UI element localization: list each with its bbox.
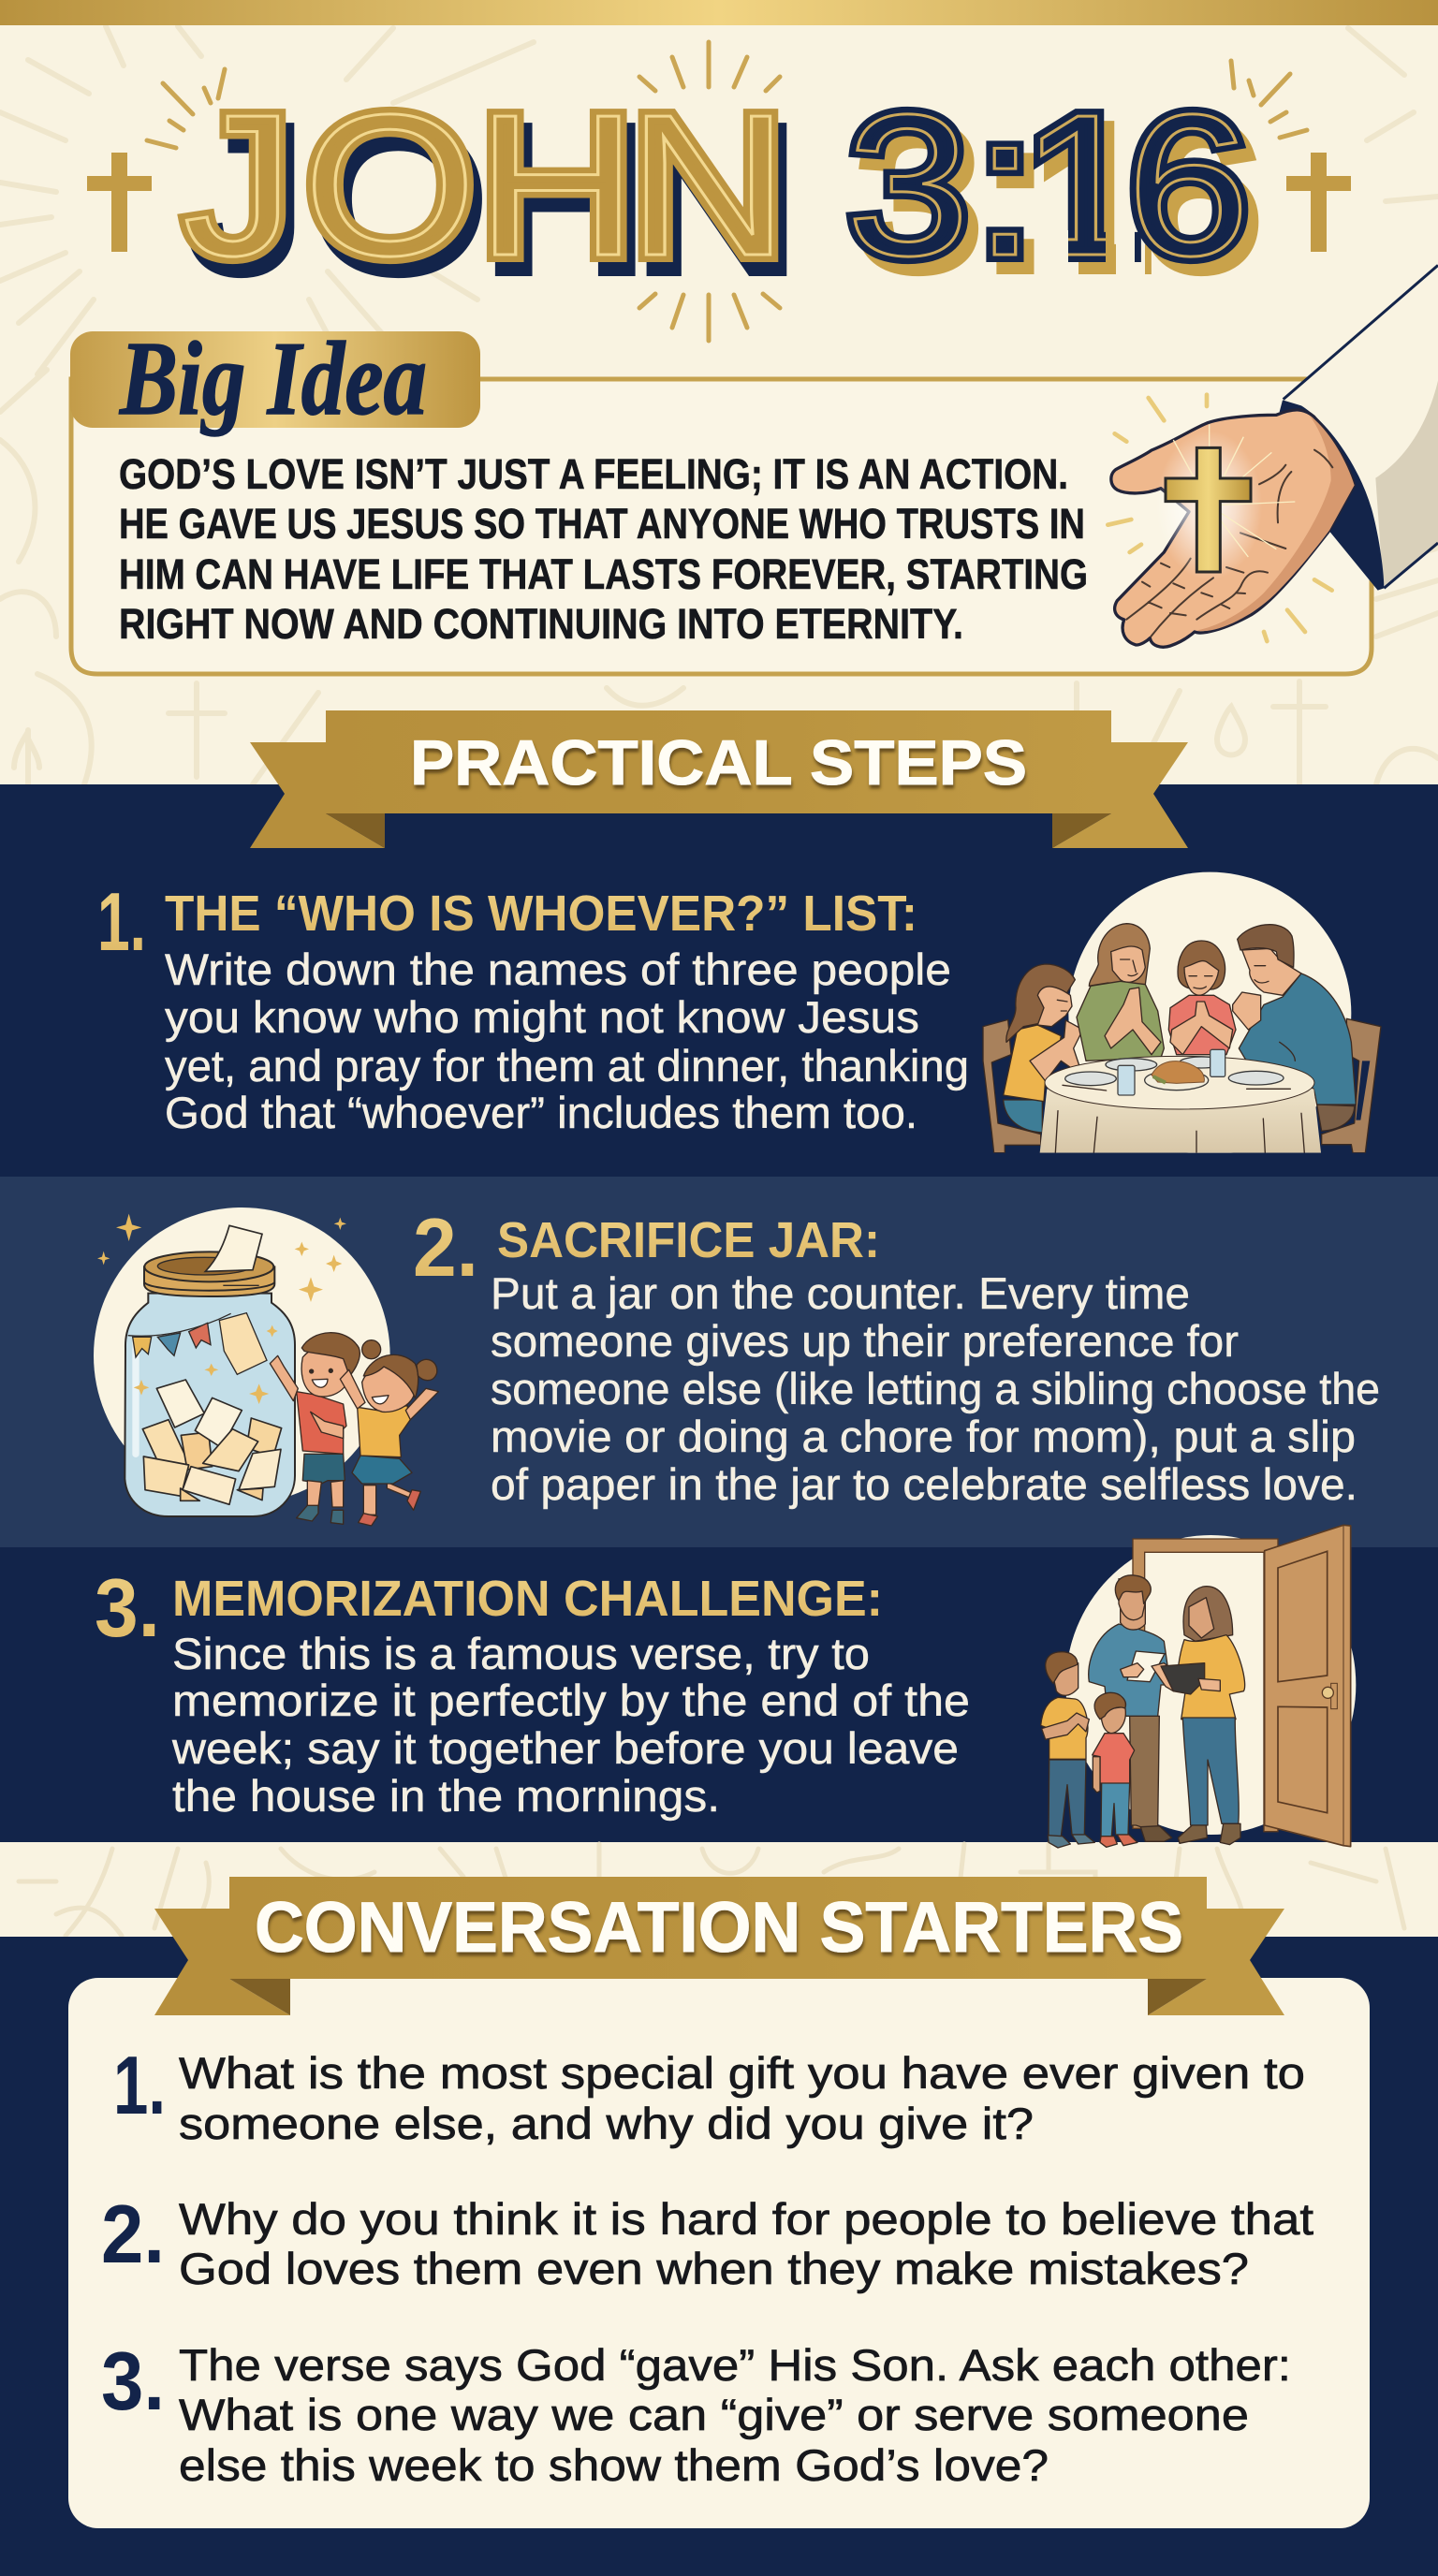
- step 1 body: God that “whoever” includes them too.: [165, 1088, 917, 1137]
- title word: JOHN: JOHN: [183, 72, 788, 298]
- jar body: [125, 1294, 295, 1516]
- falling slip: [205, 1225, 262, 1271]
- big idea tab: Big Idea: [118, 321, 427, 437]
- icon: right cross: [1286, 153, 1351, 252]
- step 3 body: the house in the mornings.: [172, 1771, 720, 1821]
- panel: big idea: [70, 321, 1372, 674]
- step 2 body: [491, 1268, 1380, 1509]
- conversation question 3: 3.: [101, 2334, 165, 2427]
- moon circle: [1065, 1535, 1356, 1835]
- older boy: [1041, 1652, 1094, 1848]
- conversation question 3: [101, 2334, 1291, 2490]
- step 1 number: 1.: [97, 875, 146, 968]
- background rays and doodles: top: [0, 26, 1438, 784]
- title sunburst rays: [147, 42, 1307, 341]
- big idea text: HE GAVE US JESUS SO THAT ANYONE WHO TRUSTS IN: [119, 500, 1085, 548]
- glow: [1156, 431, 1262, 580]
- door frame and opening: [1133, 1539, 1278, 1832]
- step 2 body: of paper in the jar to celebrate selfless love.: [491, 1459, 1357, 1509]
- boy: [270, 1333, 360, 1524]
- banner: practical steps: PRACTICAL STEPS: [410, 727, 1027, 798]
- title reference: 3:16: 3:16: [846, 72, 1250, 298]
- step 2 number: 2.: [413, 1201, 478, 1294]
- hand: [1111, 410, 1355, 647]
- banner: practical steps: [250, 710, 1188, 848]
- lower navy section: [0, 1937, 1438, 2576]
- father: [1089, 1575, 1177, 1841]
- big idea text: [119, 450, 1088, 648]
- step 2 body: movie or doing a chore for mom), put a slip: [491, 1412, 1356, 1461]
- girl: [340, 1340, 438, 1526]
- illustration: family at open door: [1041, 1525, 1356, 1848]
- conversation question 2: Why do you think it is hard for people to believe that: [179, 2194, 1313, 2244]
- younger boy: [1093, 1692, 1137, 1847]
- paper slips: [142, 1380, 282, 1504]
- step 2 heading: SACRIFICE JAR:: [497, 1212, 880, 1268]
- conversation question 3: else this week to show them God’s love?: [179, 2440, 1049, 2490]
- step 1 body: you know who might not know Jesus: [165, 992, 919, 1042]
- mother: [1161, 1587, 1245, 1845]
- cross: [1166, 447, 1251, 572]
- conversation question 2: 2.: [101, 2188, 165, 2280]
- conversation question 3: The verse says God “gave” His Son. Ask each other:: [179, 2340, 1291, 2390]
- panel: step 3 background: [0, 1547, 1438, 1842]
- conversation question 1: [113, 2039, 1305, 2148]
- banner: conversation starters: CONVERSATION STARTERS: [255, 1888, 1183, 1968]
- step 3 body: week; say it together before you leave: [171, 1723, 959, 1773]
- paper tag on jar: [219, 1313, 267, 1374]
- step 2 body: someone gives up their preference for: [491, 1316, 1239, 1366]
- jar bunting: [128, 1313, 231, 1357]
- big idea box: [71, 379, 1372, 674]
- illustration: family praying at dinner table: [983, 872, 1381, 1155]
- jar lid: [144, 1251, 274, 1296]
- middle child: [1168, 941, 1236, 1055]
- banner: conversation starters: [154, 1877, 1284, 2015]
- father: [1233, 925, 1356, 1131]
- step 1 body: yet, and pray for them at dinner, thanking: [165, 1041, 969, 1090]
- step 1 body: Write down the names of three people: [165, 944, 951, 994]
- title: [177, 107, 1258, 279]
- conversation question 1: What is the most special gift you have ever given to: [179, 2048, 1305, 2098]
- step 2 body: someone else (like letting a sibling choose the: [491, 1364, 1380, 1413]
- open door: [1265, 1525, 1351, 1847]
- sparkles: [97, 1214, 346, 1302]
- big idea text: HIM CAN HAVE LIFE THAT LASTS FOREVER, STARTING: [119, 550, 1088, 598]
- big idea text: GOD’S LOVE ISN’T JUST A FEELING; IT IS AN ACTION.: [119, 450, 1068, 498]
- step 3 body: [171, 1629, 970, 1821]
- step 2 body: Put a jar on the counter. Every time: [491, 1268, 1190, 1318]
- illustration: sacrifice jar and children: [94, 1208, 438, 1526]
- top gold bar: [0, 0, 1438, 25]
- girl on left: [1004, 964, 1083, 1133]
- sleeve: [1281, 265, 1438, 589]
- title word: JOHN: JOHN: [192, 86, 797, 312]
- panel: conversation starters card: [68, 1978, 1370, 2528]
- moon circle: [94, 1208, 390, 1504]
- chairs: [983, 1019, 1041, 1153]
- step 3 heading: MEMORIZATION CHALLENGE:: [172, 1571, 883, 1627]
- title reference: 3:16: 3:16: [846, 72, 1250, 298]
- step 1 body: [165, 944, 969, 1137]
- conversation question 3: What is one way we can “give” or serve someone: [179, 2390, 1249, 2439]
- mother: [1077, 924, 1164, 1061]
- cuff: [1280, 400, 1384, 591]
- panel: step 1 background: [0, 784, 1438, 1177]
- step 3 body: Since this is a famous verse, try to: [172, 1629, 870, 1678]
- icon: hand holding glowing cross: [1108, 265, 1438, 647]
- conversation question 2: God loves them even when they make mistakes?: [179, 2244, 1249, 2293]
- icon: left cross: [87, 153, 152, 252]
- conversation question 2: [101, 2188, 1313, 2293]
- title word: JOHN: JOHN: [183, 72, 788, 298]
- title reference: 3:16: 3:16: [857, 84, 1260, 310]
- hand rays: [1108, 395, 1332, 641]
- conversation question 1: 1.: [113, 2039, 166, 2131]
- table with meal: [1040, 1049, 1321, 1153]
- step 2 text: [413, 1201, 1380, 1509]
- middle cream strip with doodles: [19, 1844, 1404, 1936]
- step 1 text: [97, 875, 969, 1137]
- step 3 number: 3.: [95, 1561, 160, 1654]
- conversation question 1: someone else, and why did you give it?: [179, 2099, 1034, 2148]
- panel: step 2 background: [0, 1177, 1438, 1547]
- moon circle: [1068, 872, 1351, 1155]
- big idea text: RIGHT NOW AND CONTINUING INTO ETERNITY.: [119, 600, 963, 648]
- step 3 body: memorize it perfectly by the end of the: [172, 1676, 970, 1725]
- step 1 heading: THE “WHO IS WHOEVER?” LIST:: [165, 886, 917, 942]
- step 3 text: [95, 1561, 970, 1821]
